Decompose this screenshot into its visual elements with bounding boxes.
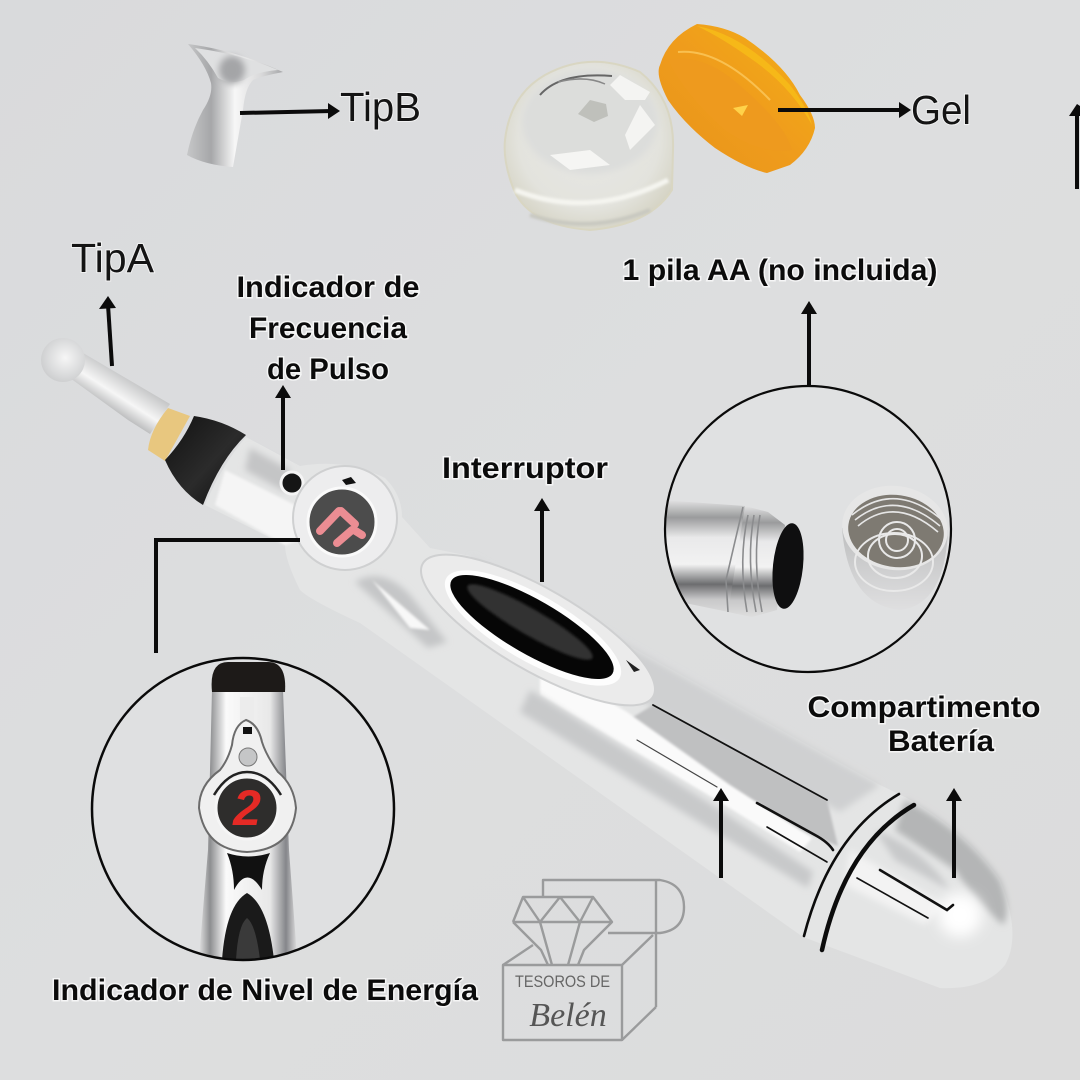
logo top line: TESOROS DE <box>515 973 610 991</box>
label: Indicador de Frecuencia de Pulso with arrow: de Pulso <box>267 353 389 386</box>
pen tube <box>666 502 745 612</box>
label: TipB with arrow: TipB <box>340 84 421 130</box>
mini pen collar <box>240 697 254 731</box>
spring <box>855 522 933 591</box>
chest lid <box>543 880 684 933</box>
main pen illustration <box>41 338 1012 988</box>
threaded collar <box>728 506 785 617</box>
label: 1 pila AA with arrow: 1 pila AA (no incluida) <box>622 254 938 287</box>
battery cap <box>842 528 948 594</box>
label: 1 pila AA with arrow <box>622 254 938 386</box>
gel orange lid <box>659 24 815 173</box>
cap threads <box>852 499 942 532</box>
pen upper soft band <box>470 556 880 812</box>
label: Indicador de Frecuencia de Pulso with arrow: Frecuencia <box>249 312 407 345</box>
chest side <box>622 935 656 1040</box>
label: Interruptor with arrow <box>442 452 608 582</box>
pen shoulder highlight <box>355 576 447 648</box>
tube opening <box>772 523 804 609</box>
callout circle: energy level <box>92 658 394 970</box>
jar contents <box>522 70 658 174</box>
mini pen cap <box>212 662 285 692</box>
label: TipB with arrow <box>240 84 421 130</box>
pen silver body <box>205 437 1012 988</box>
pen display <box>293 466 397 570</box>
chest front <box>503 965 622 1040</box>
Tip B part <box>187 44 283 167</box>
pen rear cap shading <box>895 800 1007 925</box>
pen neck chrome shading <box>215 470 300 545</box>
label: Gel with arrow: Gel <box>911 87 971 133</box>
pen dark reflection lines <box>637 705 953 918</box>
logo script line: Belén <box>529 997 607 1034</box>
label: Indicador de Nivel de Energía with elbow connector <box>52 540 478 1007</box>
pen rear highlight <box>938 893 982 937</box>
pen gray band <box>625 705 838 846</box>
label: Indicador de Frecuencia de Pulso with arrow <box>236 271 420 470</box>
callout circle: battery compartment <box>660 386 953 672</box>
pen lower gray stripe <box>520 690 813 888</box>
diamond <box>513 897 612 965</box>
mini pen body <box>198 690 298 970</box>
pen switch surround <box>402 528 674 732</box>
mini pen display <box>216 777 278 839</box>
pen white stripe <box>540 660 812 852</box>
pen gold ring <box>148 408 190 461</box>
pen neck <box>70 350 170 434</box>
pen pulse hole <box>281 472 303 494</box>
label: TipA with arrow: TipA <box>71 235 155 281</box>
gel jar <box>505 62 673 230</box>
label: Indicador de Nivel de Energía with elbow connector: Indicador de Nivel de Energía <box>52 974 478 1007</box>
pen tip ball <box>41 338 85 382</box>
mini pen lower black <box>227 853 270 890</box>
label: Compartimento Batería with arrows: Compartimento <box>808 691 1040 724</box>
logo: Tesoros de Belén <box>503 880 684 1040</box>
mini pen button <box>239 748 257 766</box>
label: TipA with arrow <box>71 235 155 366</box>
pen rings <box>804 794 914 950</box>
pen black grip <box>165 416 246 505</box>
label: Interruptor with arrow: Interruptor <box>442 452 608 485</box>
pen switch <box>438 557 626 697</box>
digit 2: 2 <box>232 780 261 836</box>
label: Indicador de Frecuencia de Pulso with arrow: Indicador de <box>236 271 420 304</box>
label: Gel with arrow <box>778 87 971 133</box>
stray arrow at right edge <box>1069 104 1080 189</box>
label: Compartimento Batería with arrows: Batería <box>888 725 994 758</box>
mini pen teardrop housing <box>199 720 296 852</box>
label: Compartimento Batería with arrows <box>713 691 1040 878</box>
